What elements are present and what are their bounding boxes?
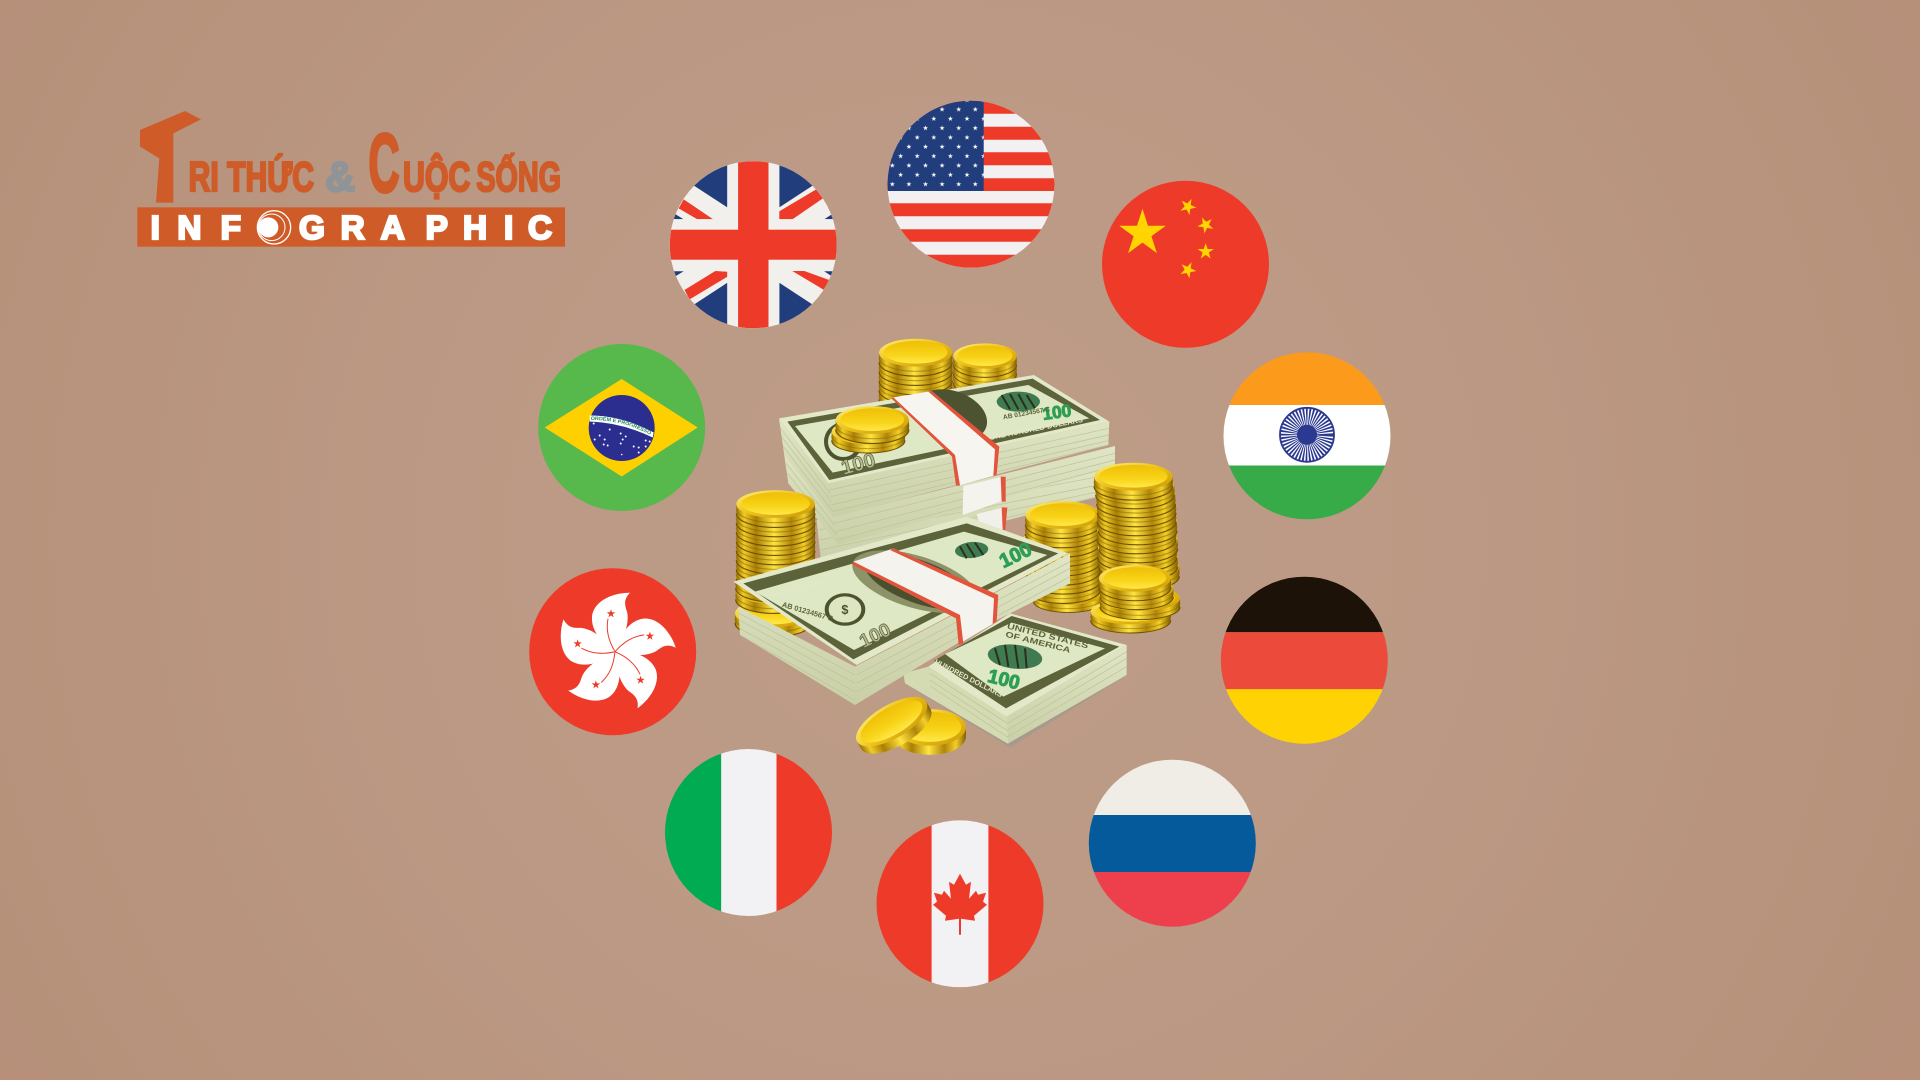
logo wordmark: UỘC: [403, 152, 470, 200]
bottom right bill bundle: OF AMERICA: [1005, 630, 1072, 655]
flag: Germany: [1220, 576, 1388, 744]
bottom right bill bundle: 100: [985, 666, 1022, 694]
front paper strap: [852, 548, 998, 645]
flag: Russia: [1088, 759, 1256, 928]
front note: 100: [996, 538, 1035, 573]
front note: AB 01234567 C: [781, 600, 835, 623]
central illustration: money and coins: [733, 339, 1180, 763]
scattered coins at bottom: [849, 687, 966, 763]
logo wordmark: C: [368, 117, 400, 210]
flag: United States: [887, 100, 1055, 268]
front note: [733, 517, 1068, 665]
top note: 100: [839, 449, 878, 480]
right coin stacks: [1020, 463, 1180, 633]
bottom bundle: [817, 467, 1098, 568]
logo wordmark: RI THỨC: [189, 152, 314, 200]
middle bundle: [784, 446, 1115, 545]
coin stack on top of bills: [832, 406, 909, 453]
bottom right bill bundle: UNITED STATES: [1006, 622, 1090, 651]
top note: ONE HUNDRED DOLLARS: [989, 415, 1084, 442]
logo wordmark: &: [325, 153, 355, 200]
flag: United Kingdom: [670, 161, 837, 328]
flag: Brazil: [538, 344, 706, 511]
flag: Brazil: ORDEM E PROGRESSO: [591, 416, 652, 434]
front note: LARGER DENOM DOLLAR: [769, 574, 843, 600]
front note: $: [841, 603, 848, 617]
flag: Hong Kong: [529, 568, 696, 735]
logo house T mark: [140, 111, 201, 203]
top note: AB 01234567 C: [1002, 406, 1051, 421]
flag: Italy: [664, 748, 832, 916]
paper straps on stack: [892, 391, 1007, 530]
back coin stacks: [879, 339, 1017, 413]
logo: Tri thức & Cuộc sống Infographic: [137, 111, 565, 247]
large bill stack: [779, 375, 1115, 568]
logo wordmark: SỐNG: [476, 152, 561, 200]
flag: India: [1223, 352, 1391, 520]
bottom right bill bundle: [902, 613, 1130, 747]
flag: China: [1102, 181, 1269, 348]
front note: 100: [856, 620, 895, 653]
logo ring icon: [255, 209, 293, 246]
top bundle: [779, 418, 1109, 517]
bottom right bill bundle: HUNDRED DOLLARS: [933, 657, 1004, 699]
logo infographic bar: INFOGRAPHIC: [151, 210, 552, 247]
top note: 100: [1041, 400, 1073, 424]
left coin stack: [735, 490, 815, 637]
front bill bundle: [733, 517, 1070, 705]
logo wordmark: [189, 117, 561, 210]
flag: Canada: [876, 820, 1044, 988]
top note: [779, 375, 1109, 483]
